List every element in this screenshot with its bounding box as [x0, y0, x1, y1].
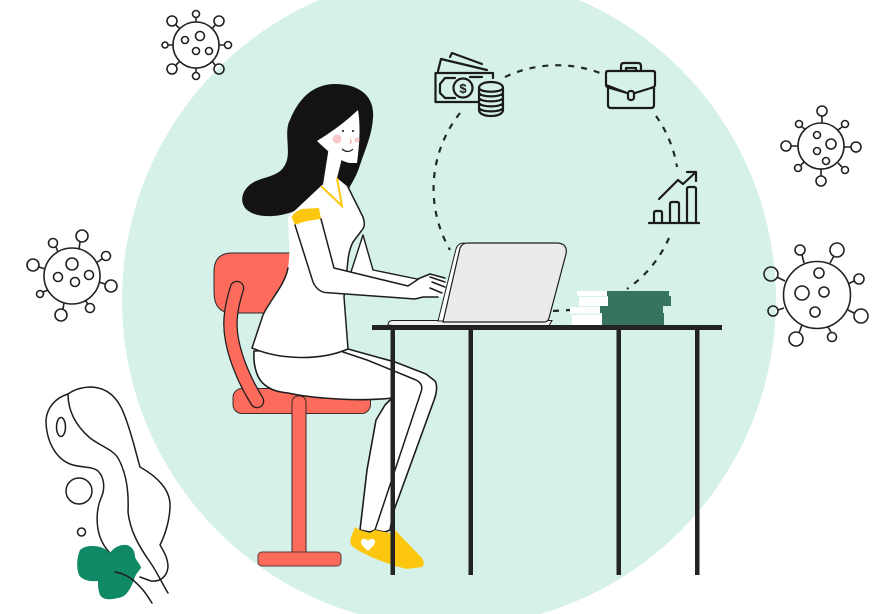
icon: money and coins — [436, 53, 503, 116]
chair base — [258, 552, 341, 566]
table — [372, 325, 722, 575]
sleeve — [292, 208, 321, 225]
plant outline — [46, 387, 170, 593]
virus left — [27, 230, 117, 321]
neck — [322, 150, 342, 188]
near arm and hand — [295, 219, 447, 299]
laptop — [388, 243, 566, 326]
chair back — [214, 253, 290, 313]
plant leaf — [77, 545, 152, 603]
chair — [214, 253, 370, 566]
icon: briefcase — [606, 63, 655, 108]
chair arm strut outline — [230, 288, 257, 401]
dollar sign: $ — [459, 81, 467, 96]
background circle — [122, 0, 776, 614]
icon: growth chart — [649, 172, 699, 223]
face details — [332, 130, 360, 152]
far arm — [350, 235, 440, 290]
chair seat — [233, 388, 370, 414]
dashed career cycle — [434, 65, 677, 311]
shirt — [252, 178, 364, 358]
chair post — [292, 396, 306, 552]
chair arm strut fill — [230, 288, 257, 401]
virus top left — [162, 10, 232, 80]
hair — [242, 84, 373, 216]
necklace — [321, 178, 342, 206]
heart — [361, 539, 375, 551]
books — [570, 291, 671, 325]
virus top right — [781, 106, 861, 186]
woman — [242, 84, 447, 569]
face — [317, 110, 360, 163]
shoes — [350, 527, 424, 569]
virus right — [764, 243, 868, 346]
skirt and legs — [254, 349, 437, 532]
